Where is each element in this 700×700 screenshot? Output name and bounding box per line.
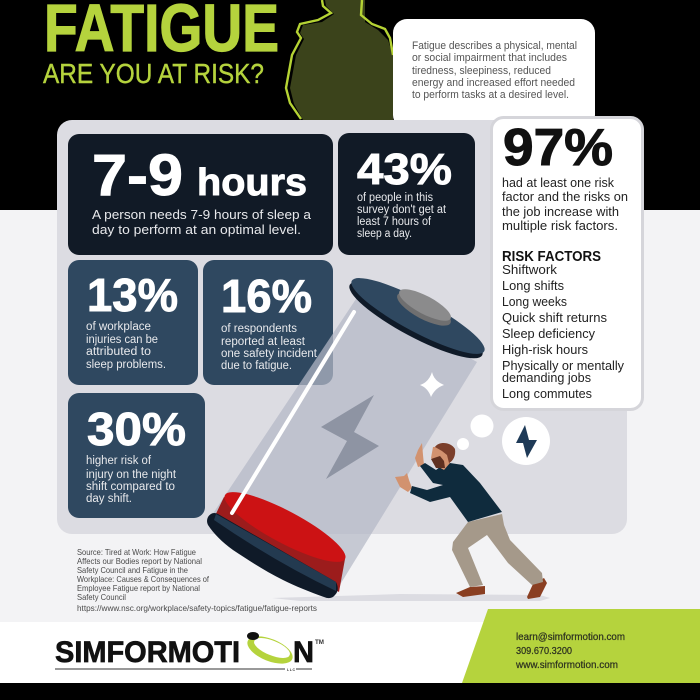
card: 97% and risk factors: the job increase with	[502, 204, 619, 219]
hands	[395, 443, 424, 492]
red charge level	[213, 481, 353, 592]
card: 16%: 16%	[221, 270, 312, 322]
card: 16%	[203, 260, 333, 385]
card: 7-9 hours	[68, 134, 333, 255]
source note: Workplace: Causes & Consequences of	[77, 574, 210, 584]
intro card: to perform tasks at a desired level.	[412, 89, 569, 101]
card: 97% and risk factors: 97%	[503, 119, 613, 177]
card: 43%	[338, 133, 475, 255]
battery bottom cap	[207, 513, 338, 598]
card: 30%: day shift.	[86, 493, 132, 505]
contact panel: learn@simformotion.com	[516, 631, 625, 643]
card: 43%: least 7 hours of	[357, 216, 432, 228]
card: 13%: sleep problems.	[86, 359, 166, 371]
shoes	[456, 578, 547, 599]
card: 97% and risk factors	[492, 118, 642, 410]
intro card: energy and increased effort needed	[412, 77, 575, 89]
sweater	[410, 463, 502, 522]
card: 97% and risk factors: Long commutes	[502, 386, 592, 401]
card: 7-9 hours: day to perform at an optimal level.	[92, 222, 301, 237]
logo: SIMFORMOTI	[55, 636, 240, 669]
card: 97% and risk factors: Shiftwork	[502, 262, 558, 277]
card: 13%	[68, 260, 198, 385]
card: 16%: of respondents	[221, 323, 297, 335]
contact panel: www.simformotion.com	[515, 659, 618, 671]
source note: Affects our Bodies report by National	[77, 556, 202, 566]
card: 97% and risk factors: multiple risk factors.	[502, 218, 618, 233]
logo: TM	[315, 639, 324, 646]
card: 13%: attributed to	[86, 346, 151, 358]
intro card: Fatigue describes a physical, mental	[412, 40, 577, 52]
card: 7-9 hours: A person needs 7-9 hours of sleep a	[92, 207, 312, 222]
source note: Employee Fatigue report by National	[77, 583, 200, 593]
main grey panel	[57, 120, 627, 534]
card: 30%: shift compared to	[86, 481, 175, 493]
sparkle	[420, 372, 444, 397]
card: 97% and risk factors: factor and the risks on	[502, 189, 628, 204]
card: 30%: higher risk of	[86, 455, 152, 467]
card: 16%: one safety incident	[221, 348, 318, 360]
card: 97% and risk factors: demanding jobs	[502, 370, 591, 385]
source note: Source: Tired at Work: How Fatigue	[77, 547, 196, 557]
logo	[55, 632, 324, 672]
contact panel: 309.670.3200	[516, 645, 572, 657]
card: 43%: 43%	[357, 145, 452, 194]
card: 97% and risk factors: Quick shift returns	[502, 310, 607, 325]
source note: Safety Council	[77, 592, 126, 602]
card: 13%: injuries can be	[86, 334, 158, 346]
card: 97% and risk factors: had at least one risk	[502, 175, 614, 190]
card: 43%: of people in this	[357, 192, 433, 204]
card: 30%: injury on the night	[86, 469, 177, 481]
card: 16%: due to fatigue.	[221, 360, 292, 372]
card: 97% and risk factors: Long weeks	[502, 294, 567, 309]
contact panel	[462, 609, 700, 683]
source note	[77, 547, 317, 613]
source note: https://www.nsc.org/workplace/safety-topics/fatigue/fatigue-reports	[77, 603, 317, 613]
ground shadow	[272, 594, 550, 601]
lightning bolt	[321, 395, 379, 479]
subtitle: ARE YOU AT RISK?	[43, 58, 264, 89]
source note: Safety Council and Fatigue in the	[77, 565, 188, 575]
intro card: or social impairment that includes	[412, 52, 568, 64]
card: 97% and risk factors: RISK FACTORS	[502, 249, 601, 265]
card: 43%: sleep a day.	[357, 228, 412, 240]
intro card: tiredness, sleepiness, reduced	[412, 65, 551, 77]
card: 97% and risk factors: Physically or mentally	[502, 358, 624, 373]
silhouette of tired worker	[286, 0, 393, 120]
card: 7-9 hours: hours	[197, 162, 307, 204]
intro card	[393, 19, 595, 129]
battery glass body	[212, 296, 477, 588]
thought bubbles	[457, 414, 550, 465]
card: 97% and risk factors: Long shifts	[502, 278, 564, 293]
battery illustration	[207, 267, 492, 598]
battery top cap	[342, 267, 492, 370]
highlight line	[232, 312, 354, 513]
card: 30%	[68, 393, 205, 518]
card: 30%: 30%	[87, 403, 186, 455]
card: 16%: reported at least	[221, 336, 306, 348]
card: 97% and risk factors: Sleep deficiency	[502, 326, 595, 341]
man pushing battery	[395, 443, 547, 599]
trousers	[452, 514, 543, 587]
card: 43%: survey don't get at	[357, 204, 447, 216]
card: 97% and risk factors: High-risk hours	[502, 342, 588, 357]
head	[431, 443, 455, 470]
card: 7-9 hours: 7-9	[92, 143, 183, 208]
card: 13%: 13%	[87, 269, 178, 321]
logo: N	[293, 636, 314, 669]
logo: LLC	[287, 668, 295, 672]
icon: lightning bolt	[516, 425, 537, 458]
card: 13%: of workplace	[86, 321, 151, 333]
